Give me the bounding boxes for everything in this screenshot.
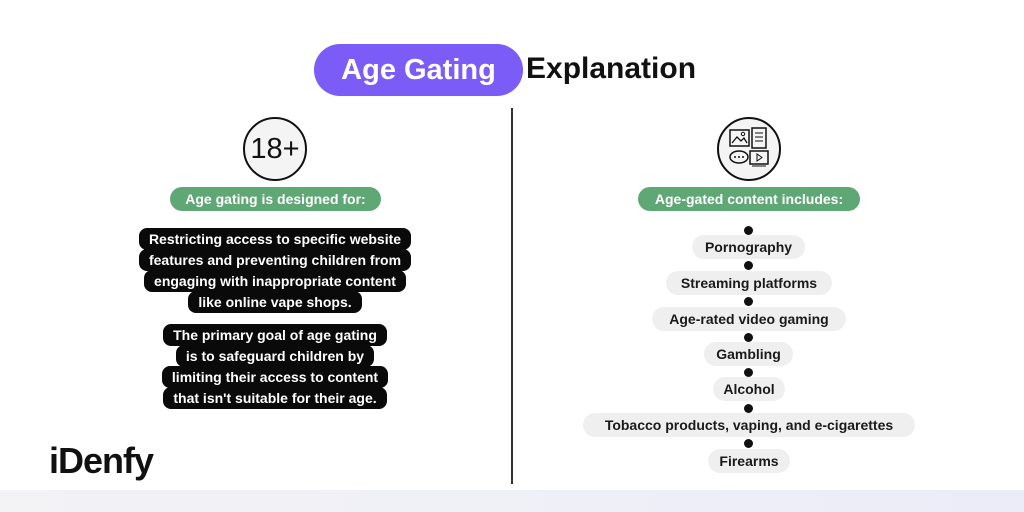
title [314,44,696,96]
item: Tobacco [583,413,915,437]
icon: 18+: 18+ [250,133,300,165]
item: Alcohol: Alcohol [723,381,775,397]
text block 2: limiting their access to content [172,369,378,385]
item: Streaming [666,271,832,295]
heading: content includes: Age-gated content includes: [655,191,843,207]
text block 1: engaging with inappropriate content [154,273,396,289]
item: Tobacco: Tobacco products, vaping, and e-cigarettes [605,417,893,433]
icon: content [717,117,781,181]
item: Gambling: Gambling [716,346,781,362]
text block 2: is to safeguard children by [186,348,364,364]
text block 1: features and preventing children from [149,252,401,268]
bottom band [0,490,1024,512]
item: Firearms [708,449,790,473]
text block 1: Restricting access to specific website [149,231,401,247]
item: Pornography: Pornography [705,239,792,255]
title pill: Age Gating [341,54,496,86]
title text: Explanation [526,52,696,85]
title pill [314,44,523,96]
item: Gambling [704,342,793,366]
item: Alcohol [713,377,785,401]
text block 2 [162,324,388,409]
item: Firearms: Firearms [719,453,779,469]
text block 1: like online vape shops. [198,294,352,310]
item: Gaming [652,307,846,331]
text block 1 [139,228,411,313]
item: Pornography [692,235,805,259]
text block 2: The primary goal of age gating [173,327,377,343]
text block 2: that isn't suitable for their age. [173,390,377,406]
item: Gaming: Age-rated video gaming [669,311,829,327]
divider [511,108,513,484]
logo: iDenfy [49,440,153,481]
icon: 18+ [243,117,307,181]
heading: designed for: Age gating is designed for: [185,191,366,207]
heading: designed for [170,187,381,211]
item: Streaming: Streaming platforms [681,275,817,291]
heading: content includes [638,187,860,211]
